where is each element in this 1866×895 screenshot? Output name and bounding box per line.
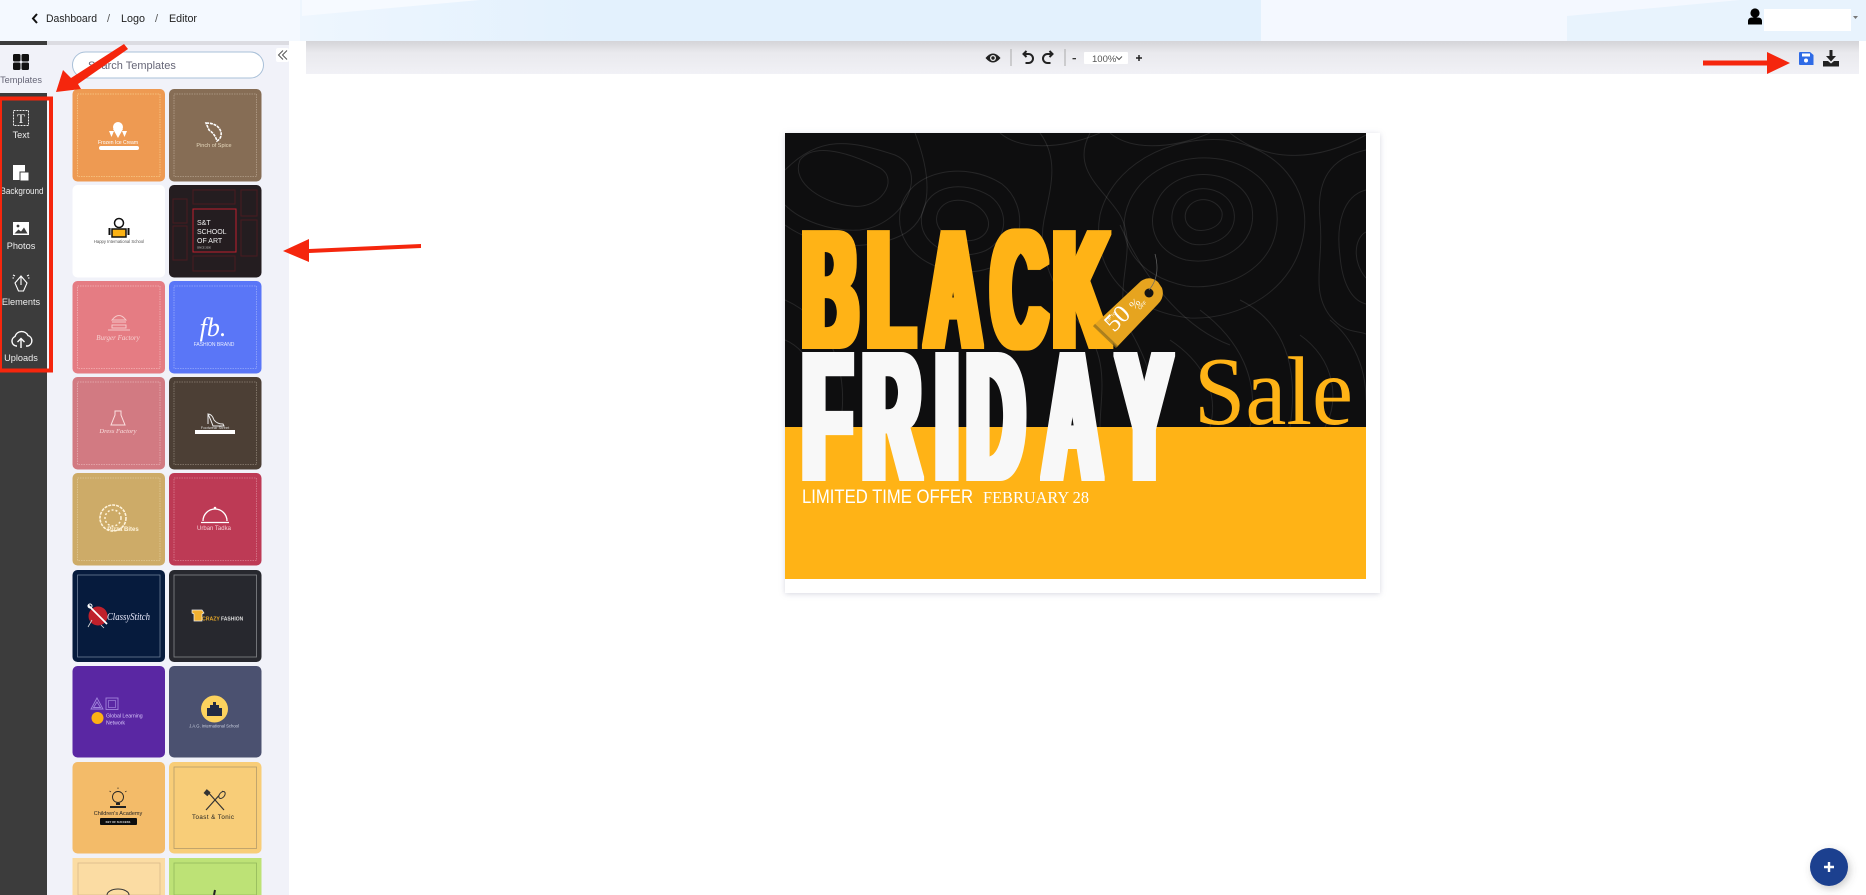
card: Fashion Brand: FASHION BRAND: [194, 342, 235, 348]
breadcrumb: Logo: [121, 13, 145, 25]
headline: BLACK: BLACK: [803, 197, 1108, 383]
card: Happy International School: Happy International School: [94, 239, 144, 244]
search field: [72, 52, 264, 78]
zoom in: [1136, 55, 1142, 61]
price tag: %: [1126, 295, 1143, 312]
label: background: Background: [0, 186, 44, 196]
card: Frozen Ice Cream: [72, 89, 165, 182]
label: text: Text: [13, 130, 30, 140]
card: Urban Tadka: Urban Tadka: [197, 526, 232, 532]
price tag: 50: [1099, 300, 1136, 337]
card: S&T School of Art: SCHOOL: [197, 229, 227, 236]
card: Toast & Tonic: Toast & Tonic: [192, 814, 234, 821]
arrow: to sidebar tools: [56, 44, 128, 92]
icon: download: [1823, 50, 1839, 66]
card: Happy International School: [72, 185, 165, 278]
arrow: to save button: [1703, 52, 1790, 74]
header shadow strip: [0, 41, 289, 45]
red highlight rectangle around tools: [0, 98, 51, 370]
label: elements: Elements: [2, 297, 41, 307]
icon: uploads cloud: [12, 332, 32, 348]
card: Urban Tadka: [169, 473, 262, 566]
card: J.A.G. International School: J.A.G. International School: [189, 724, 239, 728]
icon: templates: [13, 54, 29, 70]
topographic contour lines: [785, 133, 1366, 427]
icon: caret: [1853, 16, 1858, 19]
template grid: [72, 89, 262, 895]
collapse panel button: [276, 48, 289, 62]
icon: text tool: T: [17, 111, 25, 126]
zoom level: [1084, 52, 1128, 65]
search field: Search Templates: [88, 60, 176, 72]
card: Dress Factory: [72, 377, 165, 470]
card: Frozen Ice Cream: Frozen Ice Cream: [98, 140, 138, 146]
add button: [1810, 848, 1848, 886]
card: S&T School of Art: SINCE 2000: [197, 246, 212, 250]
poster dark background: [785, 133, 1366, 427]
poster: Black Friday sale design: [785, 133, 1366, 579]
icon: user: [1748, 8, 1762, 24]
icon: text tool: [14, 110, 28, 126]
card: J.A.G. International School: [169, 666, 262, 758]
card: Children's Academy: Children's Academy: [94, 811, 142, 817]
headline: FRIDAY: FRIDAY: [803, 314, 1170, 518]
card: S&T School of Art: [169, 185, 262, 278]
label: uploads: Uploads: [4, 353, 38, 363]
poster yellow band: [785, 427, 1366, 579]
icon: photos: [13, 222, 29, 235]
card: Dress Factory: Dress Factory: [98, 428, 137, 435]
card: Children's Academy: KEY OF SUCCESS: [106, 820, 130, 824]
card: Pizza Bites: Pizza Bites: [107, 527, 139, 533]
card: Global Learning Network: Network: [106, 720, 125, 726]
zoom out: [1072, 58, 1076, 59]
breadcrumb: Dashboard: [46, 13, 97, 25]
card: S&T School of Art: OF ART: [197, 238, 223, 245]
card: Fashion Brand: fb.: [200, 313, 226, 342]
label: templates: Templates: [0, 75, 42, 85]
label: photos: Photos: [7, 241, 36, 251]
card: Classy Stitch: [72, 570, 165, 662]
card: Global Learning Network: [72, 666, 165, 758]
poster card: [785, 133, 1380, 593]
panel: templates list background: [47, 45, 289, 895]
icon: preview eye: [986, 54, 1000, 62]
card: Pinch of Spice: [169, 89, 262, 182]
card: Burger Factory: [72, 281, 165, 374]
icon: undo: [1024, 51, 1033, 63]
card: Pizza Bites: [72, 473, 165, 566]
card: Crazy Fashion: FASHION: [221, 616, 244, 622]
price tag: UP TO: [1105, 311, 1117, 323]
icon: background: [13, 165, 29, 181]
zoom level: 100%: [1092, 54, 1117, 65]
editor toolbar: [306, 41, 1859, 74]
price tag: OFF: [1137, 300, 1148, 311]
user name box: [1764, 9, 1851, 31]
card: partial donut logo: [72, 858, 165, 895]
icon: elements pen: [12, 275, 30, 291]
breadcrumb: /: [155, 13, 159, 25]
breadcrumb: /: [107, 13, 111, 25]
headline: Sale: Sale: [1194, 338, 1353, 445]
icon: redo: [1043, 51, 1052, 63]
top header bar: [0, 0, 1866, 41]
card: Pinch of Spice: Pinch of Spice: [196, 143, 232, 149]
icon: save: [1799, 52, 1814, 65]
card: Classy Stitch: ClassyStitch: [107, 612, 150, 623]
card: S&T School of Art: S&T: [197, 220, 211, 227]
breadcrumb: Editor: [169, 13, 197, 25]
tagline: limited time offer: LIMITED TIME OFFER: [802, 487, 973, 508]
card: Toast & Tonic: [169, 762, 262, 854]
card: partial green logo: [169, 858, 262, 895]
tagline: date: FEBRUARY 28: [983, 488, 1089, 507]
card: Global Learning Network: Global Learning: [106, 714, 143, 720]
card: Children's Academy: [72, 762, 165, 854]
card: Fashion Brand: [169, 281, 262, 374]
card: Footwear Street: [169, 377, 262, 470]
panel: left tool sidebar: [0, 41, 47, 895]
arrow: to template grid: [283, 239, 421, 262]
card: Footwear Street: Footwear Street: [201, 425, 230, 430]
price tag: [1094, 254, 1163, 347]
card: Burger Factory: Burger Factory: [96, 334, 141, 342]
card: Crazy Fashion: [169, 570, 262, 662]
card: Crazy Fashion: CRAZY: [202, 616, 220, 622]
breadcrumb: [33, 13, 197, 25]
